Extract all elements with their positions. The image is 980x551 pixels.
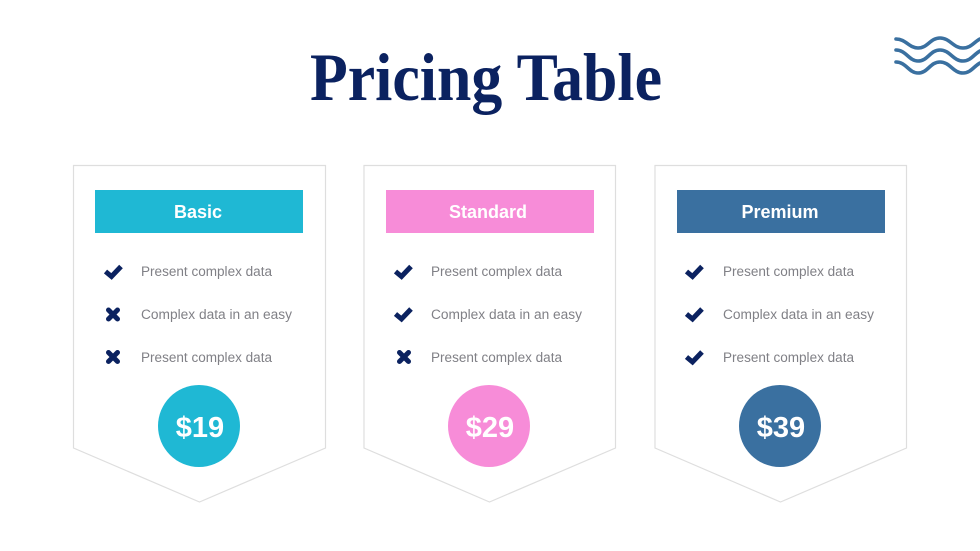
price badge: $19: $19: [176, 412, 224, 444]
title: Pricing Table: [310, 39, 662, 115]
panel: premium: [655, 166, 906, 502]
feature row 2: Complex data in an easy: [141, 307, 292, 322]
icon: waves: [896, 38, 980, 73]
feature row 3: Present complex data: [141, 350, 272, 365]
panel: standard: [364, 166, 616, 502]
feature row 3: Present complex data: [723, 350, 854, 365]
price badge: $39: $39: [757, 412, 805, 444]
header: basic: [95, 190, 303, 233]
header: basic: Basic: [174, 202, 222, 222]
card outline: basic: [74, 166, 326, 502]
price badge: $29: $29: [466, 412, 514, 444]
header: standard: [386, 190, 594, 233]
feature row 3: Present complex data: [431, 350, 562, 365]
feature row 2: Complex data in an easy: [723, 307, 874, 322]
card outline: premium: [655, 166, 906, 502]
header: standard: Standard: [449, 202, 527, 222]
panel: basic: [74, 166, 326, 502]
price badge: $29: [448, 385, 530, 467]
feature row 1: Present complex data: [141, 264, 272, 279]
header: premium: [677, 190, 885, 233]
card outline: standard: [364, 166, 616, 502]
price badge: $39: [739, 385, 821, 467]
price badge: $19: [158, 385, 240, 467]
feature row 1: Present complex data: [723, 264, 854, 279]
header: premium: Premium: [741, 202, 819, 222]
feature row 1: Present complex data: [431, 264, 562, 279]
feature row 2: Complex data in an easy: [431, 307, 582, 322]
